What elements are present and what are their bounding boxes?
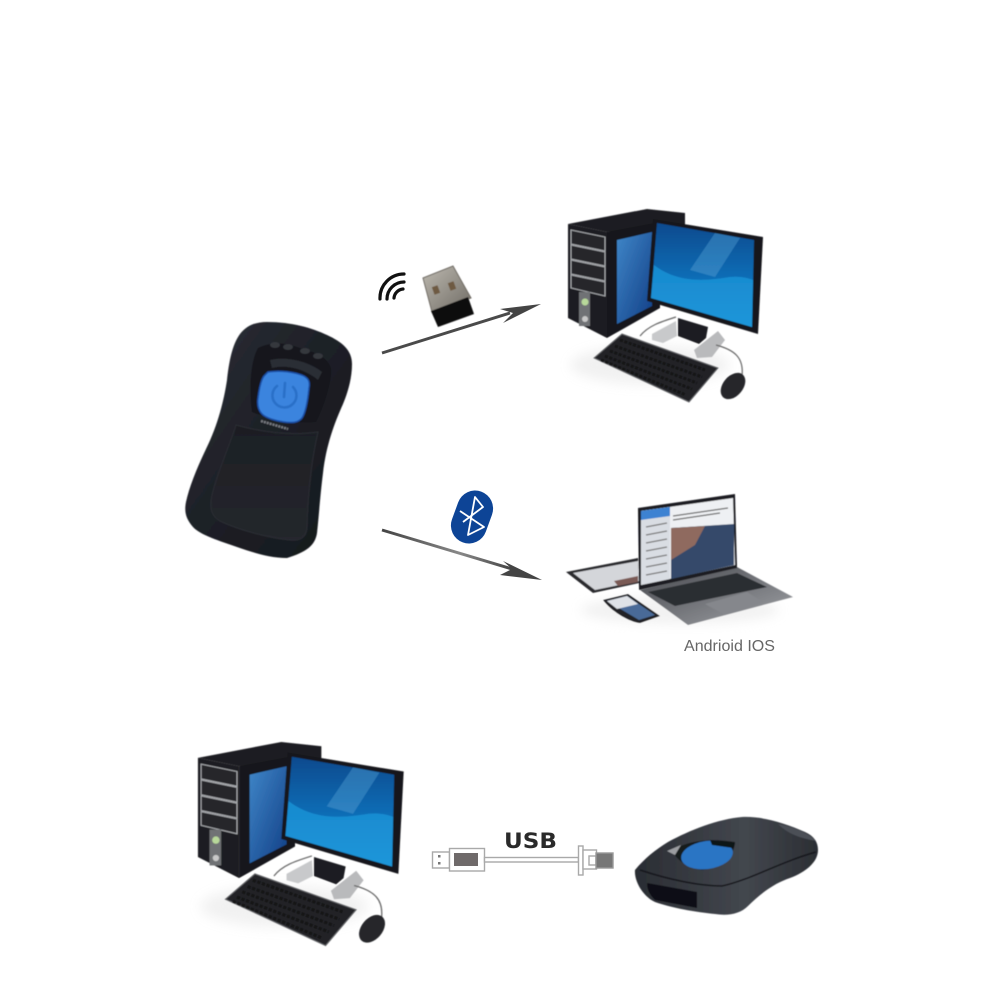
connector window xyxy=(589,856,596,865)
tablet xyxy=(566,558,639,593)
laptop screen xyxy=(641,498,735,585)
scanner body xyxy=(185,322,352,558)
desktop computer xyxy=(568,209,763,404)
power symbol xyxy=(272,383,296,407)
tower top xyxy=(568,209,685,232)
lower shell crease xyxy=(640,852,816,886)
button bezel highlight xyxy=(270,359,322,380)
USB cable diagram xyxy=(432,846,613,875)
laptop tablet and phone group xyxy=(566,494,793,625)
lower body plate xyxy=(211,425,318,540)
top sensor recess xyxy=(250,344,331,423)
keyboard xyxy=(594,334,718,402)
stand base right xyxy=(694,331,725,358)
arrow head xyxy=(500,561,542,580)
arrow shaft xyxy=(382,530,512,569)
wifi signal icon xyxy=(380,274,404,299)
blue button xyxy=(679,838,735,872)
phone screen top xyxy=(607,596,638,609)
connector plug xyxy=(596,853,613,868)
side light xyxy=(667,845,681,855)
dongle black housing xyxy=(431,297,474,327)
status LEDs xyxy=(270,342,323,359)
cable xyxy=(484,858,578,862)
bluetooth badge xyxy=(446,485,498,549)
USB label: USB xyxy=(504,829,557,853)
blue power button xyxy=(258,371,309,423)
monitor screen xyxy=(651,223,754,327)
scanner device front view xyxy=(185,322,352,558)
plug label xyxy=(454,853,478,866)
side window glow xyxy=(617,232,652,324)
photo warm patch xyxy=(671,526,705,560)
monitor stand xyxy=(678,318,708,344)
laptop keyboard xyxy=(648,573,767,606)
screen wave xyxy=(651,265,753,327)
button top notch xyxy=(710,840,735,848)
scanner device angled view xyxy=(635,817,818,915)
phone xyxy=(603,594,660,623)
trackpad xyxy=(705,592,763,615)
arrow to laptop and mobile devices xyxy=(382,530,542,580)
tablet image xyxy=(614,576,638,586)
message text lines xyxy=(673,508,728,520)
stand base left xyxy=(652,321,677,343)
phone screen xyxy=(607,596,655,620)
bluetooth capsule xyxy=(446,485,498,549)
monitor frame xyxy=(647,219,763,334)
upper shell highlight xyxy=(778,824,816,841)
screen light streak xyxy=(690,233,740,277)
tower front xyxy=(568,224,607,338)
cables xyxy=(640,317,742,376)
scan window xyxy=(647,883,697,908)
second desktop computer xyxy=(198,742,404,948)
sidebar rows xyxy=(646,523,667,575)
desk shadow xyxy=(570,345,730,385)
USB plug body xyxy=(450,848,484,871)
keyboard keys xyxy=(601,340,705,395)
mouse xyxy=(716,368,750,404)
sidebar top bar xyxy=(641,507,670,520)
wireless USB dongle xyxy=(423,266,474,327)
tablet screen xyxy=(573,561,639,590)
scanner body xyxy=(635,817,818,915)
tower buttons xyxy=(579,292,590,326)
dongle contacts xyxy=(432,281,456,295)
brand mark xyxy=(261,421,288,429)
dongle metal connector xyxy=(423,266,471,312)
button recess xyxy=(672,840,735,870)
USB plug tip xyxy=(432,852,450,868)
bluetooth rune xyxy=(460,497,484,535)
connector body xyxy=(583,850,596,869)
arrow to desktop computer xyxy=(382,304,541,353)
tower side window xyxy=(607,222,660,338)
drive bays xyxy=(571,230,605,296)
laptop base xyxy=(640,567,793,625)
connector flange xyxy=(578,846,583,875)
mail sidebar xyxy=(641,507,670,585)
message photo xyxy=(671,524,734,579)
devices shadow xyxy=(580,596,780,624)
arrow head xyxy=(500,304,541,323)
laptop lid xyxy=(638,494,737,590)
platform label: Andrioid IOS xyxy=(684,638,775,655)
arrow shaft xyxy=(382,313,510,353)
